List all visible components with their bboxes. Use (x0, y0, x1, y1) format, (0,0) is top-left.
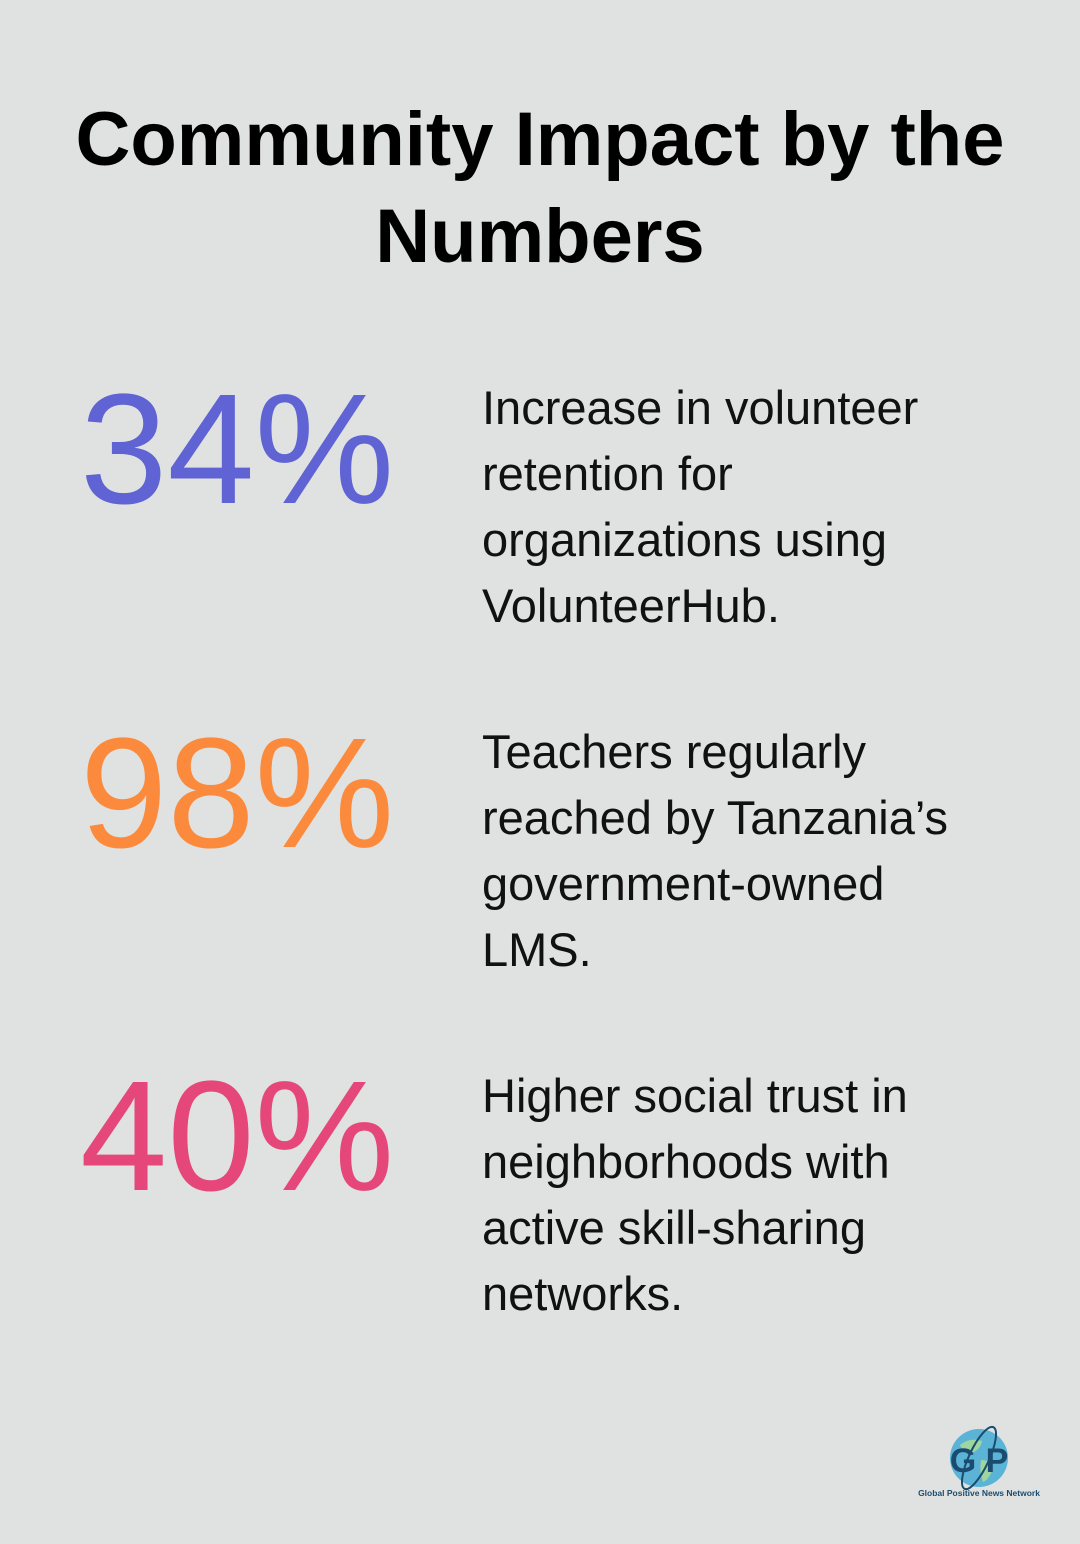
text: 40% description: networks. (482, 1267, 683, 1320)
text: 98% description: reached by Tanzania’s (482, 791, 948, 844)
stat: 40%: 40% (80, 1049, 394, 1224)
text: 34% description (482, 381, 918, 632)
text: 34% description: Increase in volunteer (482, 381, 918, 434)
text: 34% description: retention for (482, 447, 733, 500)
text: 40% description (482, 1069, 908, 1320)
title: Numbers (375, 194, 705, 279)
logo: G P (950, 1442, 1008, 1480)
text: 40% description: Higher social trust in (482, 1069, 908, 1122)
text: 98% description: Teachers regularly (482, 725, 866, 778)
logo (918, 1426, 1040, 1498)
title (76, 97, 1004, 279)
text: 40% description: neighborhoods with (482, 1135, 890, 1188)
text: 98% description: government-owned (482, 857, 884, 910)
stat: 34%: 34% (80, 362, 394, 537)
title: Community Impact by the (76, 97, 1004, 182)
text: 98% description (482, 725, 948, 976)
text: 34% description: VolunteerHub. (482, 579, 780, 632)
text: 40% description: active skill-sharing (482, 1201, 866, 1254)
text: 34% description: organizations using (482, 513, 887, 566)
stat: 98%: 98% (80, 706, 394, 881)
logo: Global Positive News Network (918, 1488, 1040, 1498)
text: 98% description: LMS. (482, 923, 592, 976)
